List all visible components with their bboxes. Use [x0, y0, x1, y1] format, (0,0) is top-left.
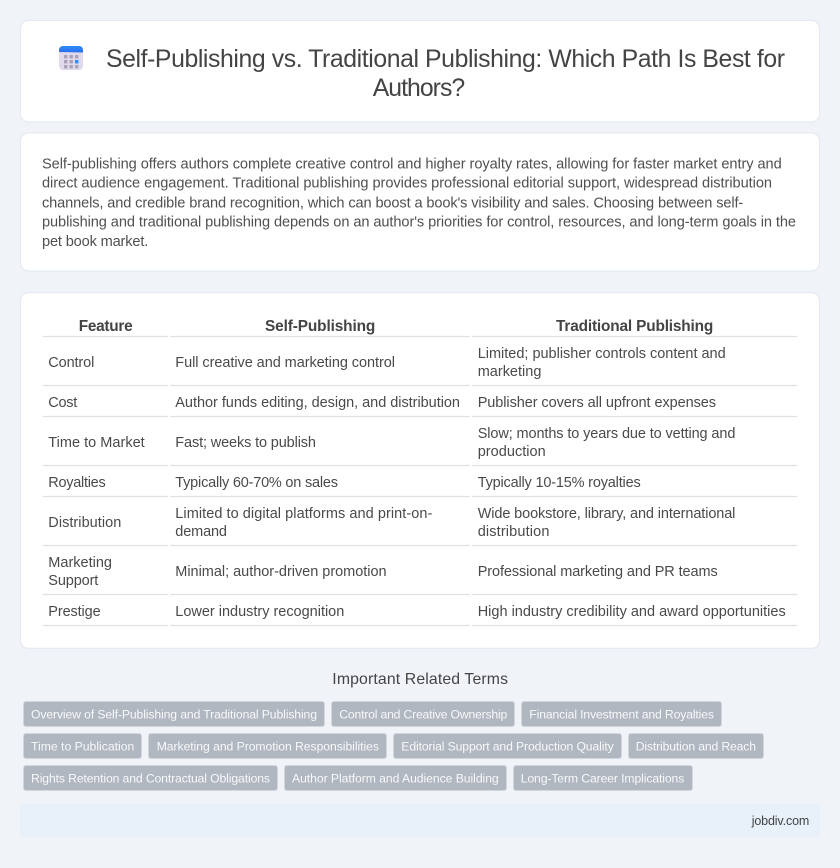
tag row 2	[24, 734, 764, 758]
tag row 3: Long-Term Career Implications	[521, 771, 684, 785]
intro text block	[42, 156, 796, 250]
tag row 2: Marketing and Promotion Responsibilities	[157, 739, 379, 753]
row: time to market: Time to Market	[48, 435, 145, 451]
row: cost: Cost	[48, 395, 77, 411]
row: royalties: Typically 10-15% royalties	[478, 475, 641, 491]
row: distribution: Distribution	[48, 515, 121, 531]
row: distribution: distribution	[478, 524, 549, 540]
row: cost: Author funds editing, design, and distribution	[175, 395, 460, 411]
related term tags	[24, 702, 764, 790]
intro text block: Self-publishing offers authors complete creative control and higher royalty rates, allowing for faster market entry and	[42, 156, 782, 172]
icon: calendar	[59, 46, 83, 70]
row: time to market: Fast; weeks to publish	[175, 435, 316, 451]
panel: comparison table	[20, 293, 820, 648]
row: prestige: Lower industry recognition	[175, 604, 344, 620]
row: control: Control	[48, 355, 94, 371]
footer: jobdiv.com	[751, 814, 809, 828]
table header row: Self-Publishing	[265, 318, 375, 335]
tag row 2: Distribution and Reach	[636, 739, 756, 753]
header panel	[20, 20, 820, 122]
row: cost: Publisher covers all upfront expenses	[478, 395, 716, 411]
table header row	[79, 318, 713, 335]
row: time to market: production	[478, 444, 546, 460]
tag row 2: Editorial Support and Production Quality	[401, 739, 615, 753]
tag row 3: Rights Retention and Contractual Obligations	[31, 771, 270, 785]
row: marketing support: Marketing	[48, 555, 112, 571]
row: royalties	[48, 475, 641, 491]
row: marketing support: Minimal; author-driven promotion	[175, 564, 387, 580]
tag row 3	[24, 766, 692, 790]
intro text block: publishing and traditional publishing depends on an author's priorities for control, resources, and long-term goals in the	[42, 215, 796, 231]
table header row: Feature	[79, 318, 133, 335]
tag row 1	[24, 702, 722, 726]
row: marketing support	[48, 555, 718, 589]
footer	[20, 804, 820, 838]
row: prestige: Prestige	[48, 604, 101, 620]
tag row 3: Author Platform and Audience Building	[292, 771, 499, 785]
row: control: Limited; publisher controls content and	[478, 346, 726, 362]
row: prestige	[48, 604, 786, 620]
title	[106, 46, 785, 102]
row: distribution: demand	[175, 524, 227, 540]
panel: introduction	[20, 133, 820, 271]
row: time to market: Slow; months to years due to vetting and	[478, 426, 735, 442]
intro text block: channels, and credible brand recognition, which can boost a book's visibility and sales. Choosing between self-	[42, 195, 743, 211]
related terms heading: Important Related Terms	[332, 671, 508, 688]
row: distribution: Wide bookstore, library, and international	[478, 506, 735, 522]
row: royalties: Typically 60-70% on sales	[175, 475, 338, 491]
table header row: Traditional Publishing	[556, 318, 713, 335]
title: Self-Publishing vs. Traditional Publishing: Which Path Is Best for	[106, 46, 785, 73]
intro text block: direct audience engagement. Traditional publishing provides professional editorial support, widespread distribution	[42, 176, 772, 192]
row: distribution	[48, 506, 735, 540]
intro text block: pet book market.	[42, 234, 148, 250]
tag row 1: Financial Investment and Royalties	[529, 707, 714, 721]
tag row 2: Time to Publication	[31, 739, 134, 753]
row: distribution: Limited to digital platforms and print-on-	[175, 506, 432, 522]
row: time to market	[48, 426, 735, 460]
row: cost	[48, 395, 716, 411]
tag row 1: Overview of Self-Publishing and Traditional Publishing	[31, 707, 317, 721]
row: prestige: High industry credibility and award opportunities	[478, 604, 786, 620]
row: control: marketing	[478, 364, 541, 380]
title: Authors?	[373, 75, 465, 102]
row: control	[48, 346, 726, 380]
row: marketing support: Professional marketing and PR teams	[478, 564, 718, 580]
tag row 1: Control and Creative Ownership	[339, 707, 508, 721]
row: control: Full creative and marketing control	[175, 355, 395, 371]
row: royalties: Royalties	[48, 475, 106, 491]
row: marketing support: Support	[48, 573, 98, 589]
